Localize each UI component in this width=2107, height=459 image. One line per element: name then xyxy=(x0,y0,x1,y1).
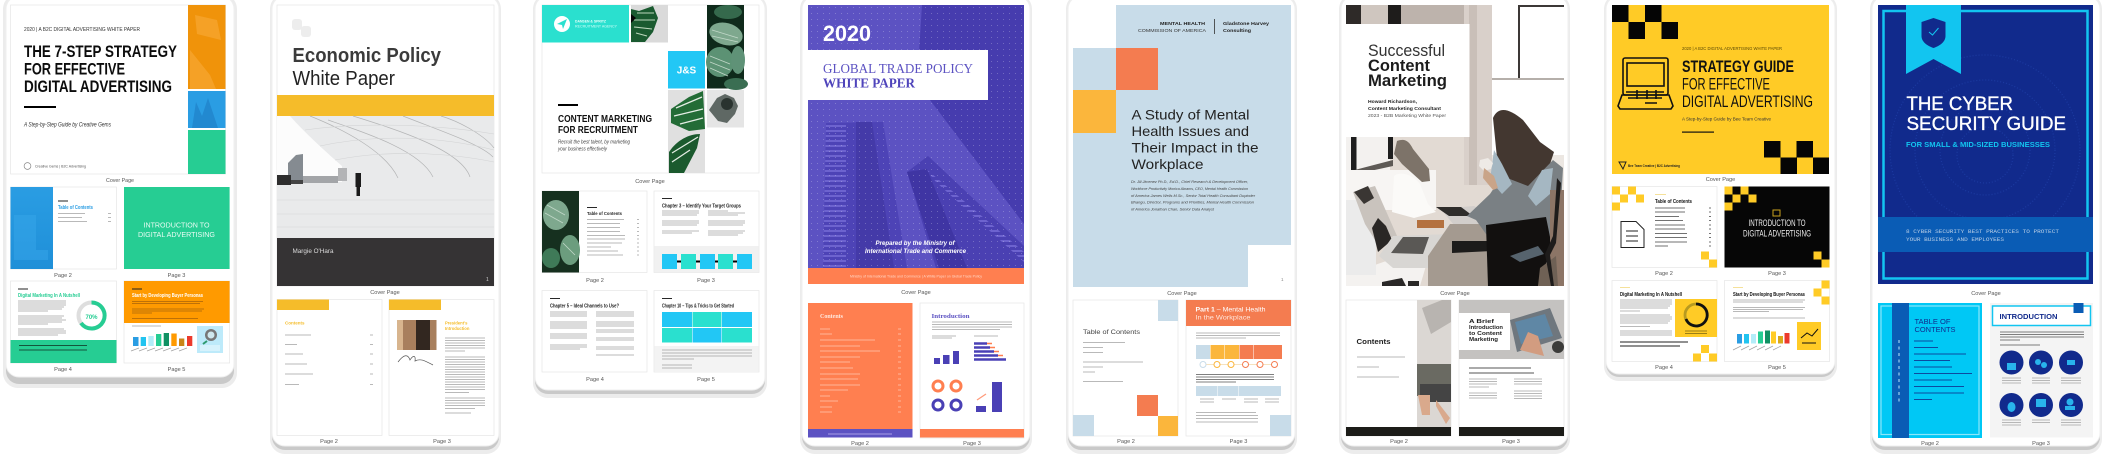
title box: Howard Richardson, xyxy=(1368,99,1418,105)
footer band: Ministry of International Trade and Commerce | A White Paper on Global Trade Policy xyxy=(850,274,982,278)
page 3: INTRODUCTION TO xyxy=(144,222,210,230)
caption: Cover Page xyxy=(901,290,931,296)
authors: of America Jonathan Chan, Senior Data Analyst xyxy=(1131,206,1215,212)
page 2: Table of Contents xyxy=(1083,330,1140,336)
caption: Page 5 xyxy=(168,367,185,373)
brand block xyxy=(668,51,705,88)
page 2 xyxy=(542,191,647,272)
title box xyxy=(1346,24,1470,137)
card: economic policy white paper xyxy=(270,0,501,454)
title: FOR EFFECTIVE xyxy=(1682,74,1770,94)
page 3: DIGITAL ADVERTISING xyxy=(1743,228,1811,238)
card: content marketing for recruitment xyxy=(533,0,767,398)
author: Margie O'Hara xyxy=(292,249,334,255)
caption: Page 3 xyxy=(1502,439,1520,445)
page 2: TABLE OF xyxy=(1914,319,1950,326)
page 3: Part 1 – Mental Health xyxy=(1196,306,1266,314)
caption: Cover Page xyxy=(1971,291,2001,297)
page 4: Digital Marketing In A Nutshell xyxy=(1620,292,1683,298)
page 4 xyxy=(542,290,647,372)
title: Workplace xyxy=(1132,156,1204,172)
kicker: 2020 | A B2C DIGITAL ADVERTISING WHITE PAPER xyxy=(24,27,140,33)
page 4: 70% xyxy=(85,315,98,321)
page 3: Introduction xyxy=(445,326,470,331)
page 3: Chapter 3 – Identify Your Target Groups xyxy=(662,204,741,210)
caption: Page 5 xyxy=(1768,365,1786,371)
page 3 xyxy=(920,303,1024,438)
caption: Page 3 xyxy=(963,441,981,447)
title: Their Impact in the xyxy=(1132,140,1259,156)
page 2: Contents xyxy=(285,320,305,326)
ribbon xyxy=(1906,5,1961,74)
photo: succulent xyxy=(707,90,744,128)
title: A Study of Mental xyxy=(1132,106,1250,122)
page 3 xyxy=(654,191,759,272)
photo: leaves tall xyxy=(706,5,748,90)
rule xyxy=(1682,132,1714,133)
caption: Page 2 xyxy=(54,273,72,279)
page number: 1 xyxy=(486,277,489,283)
card: strategy guide xyxy=(1604,0,1837,381)
band xyxy=(1878,217,2093,252)
page 4 xyxy=(1612,280,1717,362)
page 3: In the Workplace xyxy=(1196,314,1251,322)
page 5: Chapter 10 – Tips & Tricks to Get Started xyxy=(662,304,734,310)
title: THE 7-STEP STRATEGY xyxy=(24,42,178,61)
cover page xyxy=(808,5,1024,284)
logo line: Bee Team Creative | B2C Advertising xyxy=(1628,164,1681,168)
card: global trade policy white paper xyxy=(800,0,1032,454)
logo line: Creative Gems | B2C Advertising xyxy=(35,165,86,169)
page 2 xyxy=(1878,303,1982,438)
authors: Workforce Productivity Monica Abrams, CEO, Mental Health Commission xyxy=(1131,186,1248,191)
page 5 xyxy=(654,290,759,372)
title: DIGITAL ADVERTISING xyxy=(24,77,172,96)
caption: Cover Page xyxy=(1440,291,1470,297)
commission header: MENTAL HEALTH xyxy=(1160,21,1206,27)
page 2: Contents xyxy=(1356,339,1391,346)
page 3: President's xyxy=(445,320,468,326)
page 2: Table of Contents xyxy=(587,211,622,216)
agency header xyxy=(542,5,629,42)
page 3: to Content xyxy=(1469,331,1502,337)
page 2 xyxy=(10,187,116,269)
agency header: DANSEN & SPRITZ xyxy=(575,20,607,24)
commission header: Consulting xyxy=(1223,28,1251,34)
card: digital advertising white paper xyxy=(3,0,237,388)
caption: Page 3 xyxy=(1230,439,1247,445)
title: FOR EFFECTIVE xyxy=(24,60,125,78)
title xyxy=(1906,94,2066,135)
cover page xyxy=(1612,5,1829,174)
caption: Page 3 xyxy=(168,273,185,279)
page 2 xyxy=(1612,186,1717,268)
caption: Page 2 xyxy=(1117,439,1135,445)
subtitle: A Step-by-Step Guide by Creative Gems xyxy=(23,122,111,128)
agency header: RECRUITMENT AGENCY xyxy=(575,24,618,28)
inner frame xyxy=(1884,11,2088,278)
subtitle: A Step-by-Step Guide by Bee Team Creative xyxy=(1682,116,1771,122)
commission header: Gladstone Harvey xyxy=(1223,21,1269,27)
page 2: CONTENTS xyxy=(1914,327,1956,334)
title xyxy=(558,114,652,136)
page 2: Table of Contents xyxy=(58,205,93,211)
page 5: Start by Developing Buyer Personas xyxy=(132,293,203,299)
subtitle xyxy=(557,140,630,152)
page 2 xyxy=(808,303,912,438)
caption: Page 2 xyxy=(1921,441,1939,447)
caption: Cover Page xyxy=(1706,177,1735,183)
caption: Page 2 xyxy=(1655,271,1673,277)
page number: 1 xyxy=(1281,277,1284,282)
commission header: COMMISSION OF AMERICA xyxy=(1138,28,1207,34)
caption: Page 3 xyxy=(697,278,715,284)
caption: Page 2 xyxy=(320,439,338,445)
card: mental health study xyxy=(1066,0,1297,454)
rule xyxy=(558,104,578,106)
authors: Bhangu, Director, Programs and Priorities, Mental Health Commission xyxy=(1131,200,1254,205)
cover page xyxy=(1073,5,1291,287)
colour strips xyxy=(188,5,226,174)
brand block: J&S xyxy=(677,66,697,76)
page 3 xyxy=(1186,300,1291,436)
page 3: INTRODUCTION xyxy=(2000,314,2058,321)
caption: Page 5 xyxy=(697,377,715,383)
page 3 xyxy=(1990,303,2093,438)
title box: GLOBAL TRADE POLICY xyxy=(823,62,973,77)
caption: Cover Page xyxy=(106,178,134,184)
title xyxy=(1132,106,1259,172)
rule xyxy=(24,106,56,108)
caption: Page 4 xyxy=(586,377,604,383)
subtitle: your business effectively xyxy=(557,146,607,152)
logo line xyxy=(24,163,86,169)
kicker: 2020 | A B2C DIGITAL ADVERTISING WHITE PAPER xyxy=(1682,46,1782,52)
prepared by: Prepared by the Ministry of xyxy=(876,240,955,247)
page 3 xyxy=(1459,300,1564,436)
subtitle: FOR SMALL & MID-SIZED BUSINESSES xyxy=(1906,142,2050,149)
cover page xyxy=(542,5,759,173)
title: DIGITAL ADVERTISING xyxy=(1682,92,1813,111)
photo: skyscrapers xyxy=(808,5,1024,268)
caption: Page 3 xyxy=(2032,441,2050,447)
page 4: Digital Marketing In A Nutshell xyxy=(18,293,81,299)
cover page xyxy=(277,5,494,286)
author band xyxy=(277,238,494,286)
year: 2020 xyxy=(823,21,871,46)
title: THE CYBER xyxy=(1906,94,2013,115)
page 3 xyxy=(124,187,230,269)
cover page xyxy=(1878,5,2093,284)
title: SECURITY GUIDE xyxy=(1906,114,2066,135)
title box: WHITE PAPER xyxy=(823,76,916,92)
caption: Cover Page xyxy=(370,290,400,296)
title box xyxy=(808,50,988,100)
page 2: Table of Contents xyxy=(1655,199,1692,205)
page 3 xyxy=(389,300,494,436)
page 5 xyxy=(124,281,230,363)
prepared by: International Trade and Commerce xyxy=(865,248,966,255)
cover page xyxy=(1346,5,1564,286)
checker bottom xyxy=(1764,141,1829,174)
title box: 2023 - B2B Marketing White Paper xyxy=(1368,113,1446,119)
caption: Page 4 xyxy=(54,367,72,373)
page 3: DIGITAL ADVERTISING xyxy=(138,232,215,239)
caption: Page 3 xyxy=(1768,271,1786,277)
checker top xyxy=(1612,5,1678,39)
page 2 xyxy=(277,300,382,436)
photo: woman at laptop xyxy=(1346,5,1564,286)
page 3: INTRODUCTION TO xyxy=(1748,218,1806,228)
page 2 xyxy=(1073,300,1178,436)
title: Health Issues and xyxy=(1132,123,1249,139)
authors xyxy=(1131,179,1256,212)
page 4 xyxy=(10,281,116,363)
prepared by xyxy=(865,240,966,255)
page 3: Marketing xyxy=(1469,337,1498,343)
caption: Page 2 xyxy=(1390,439,1408,445)
title box: Successful xyxy=(1368,41,1445,60)
authors: Dr. Jill Jimenez Ph.D., Ed.D., Chief Research & Development Officer, xyxy=(1131,179,1248,184)
subtitle: Recruit the best talent, by marketing xyxy=(558,140,630,146)
page 2: Contents xyxy=(820,314,844,320)
tagline xyxy=(1906,229,2060,243)
caption: Page 4 xyxy=(1655,365,1673,371)
page 3: A Brief xyxy=(1469,319,1494,325)
page 3: Introduction xyxy=(932,313,970,320)
page 2 xyxy=(1346,300,1451,436)
caption: Cover Page xyxy=(1167,291,1197,297)
footer band xyxy=(808,268,1024,284)
logo line xyxy=(1619,162,1681,169)
caption: Page 2 xyxy=(586,278,604,284)
title box: Marketing xyxy=(1368,71,1447,90)
icon: shield xyxy=(1922,18,1946,48)
title box: Content xyxy=(1368,56,1430,75)
yellow band xyxy=(277,95,494,116)
logo xyxy=(292,19,311,37)
tagline: YOUR BUSINESS AND EMPLOYEES xyxy=(1906,237,2004,243)
card: cyber security guide xyxy=(1870,0,2102,454)
caption: Page 3 xyxy=(433,439,451,445)
title: CONTENT MARKETING xyxy=(558,114,652,125)
title: FOR RECRUITMENT xyxy=(558,125,638,136)
page 3: Introduction xyxy=(1469,325,1503,331)
photo: monstera pair xyxy=(668,90,705,173)
subtitle: White Paper xyxy=(292,68,395,90)
title: Economic Policy xyxy=(292,45,442,67)
faint eye pattern xyxy=(1890,55,2080,245)
title box: Content Marketing Consultant xyxy=(1368,106,1441,112)
title xyxy=(24,42,178,96)
photo: monstera xyxy=(631,5,668,42)
photo: white architecture xyxy=(277,116,494,238)
page 5: Start by Developing Buyer Personas xyxy=(1733,292,1805,298)
colour squares xyxy=(1073,5,1291,287)
icon: laptop xyxy=(1618,58,1673,109)
tagline: 8 CYBER SECURITY BEST PRACTICES TO PROTECT xyxy=(1906,229,2060,235)
page 5 xyxy=(1724,280,1830,362)
page 3 xyxy=(1724,186,1830,268)
authors: of America James Wells M.Sc., Senior Total Health Consultant Dupinder xyxy=(1131,193,1256,198)
commission header xyxy=(1138,19,1269,34)
page 4: Chapter 5 – Ideal Channels to Use? xyxy=(550,304,619,310)
caption: Page 2 xyxy=(851,441,869,447)
title: STRATEGY GUIDE xyxy=(1682,57,1794,76)
card: successful content marketing xyxy=(1339,0,1570,454)
title xyxy=(1682,57,1813,111)
cover page xyxy=(10,5,226,174)
caption: Cover Page xyxy=(635,179,665,185)
